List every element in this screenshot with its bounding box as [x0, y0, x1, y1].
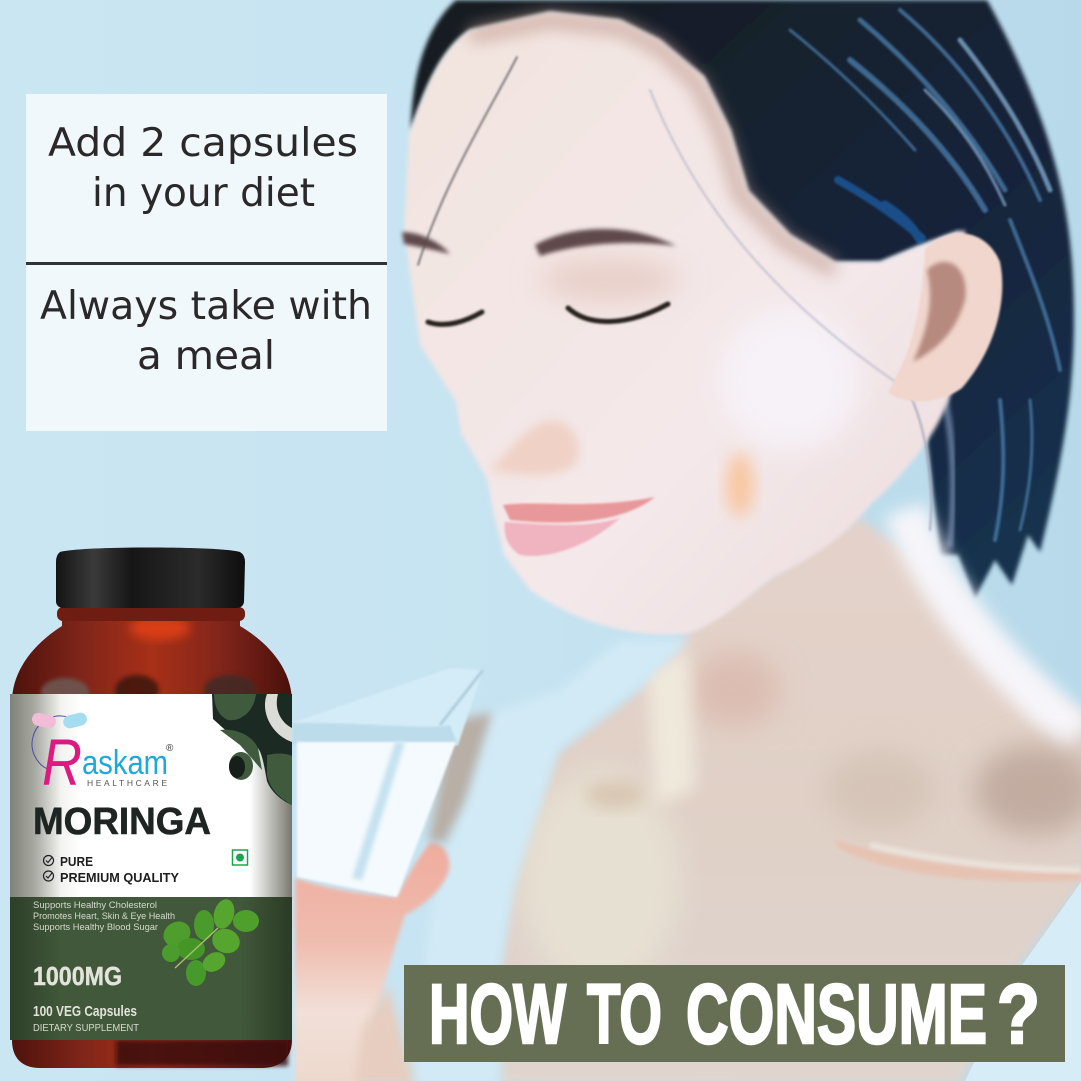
nose shading [490, 420, 579, 475]
eyebrows [402, 229, 676, 256]
text: add 2 capsules: Add 2 capsules [48, 121, 358, 166]
neck and chest [500, 517, 1081, 1081]
instruction panel [26, 94, 387, 431]
banner heading [429, 967, 1040, 1061]
text: add 2 capsules: in your diet [92, 171, 315, 216]
text: add 2 capsules [48, 121, 358, 216]
tank strap right [965, 882, 1081, 1081]
shadow by glass [428, 712, 492, 842]
dosage: 1000MG [33, 961, 122, 991]
hair [411, 0, 1074, 598]
bottle glare [130, 616, 190, 640]
ear [888, 233, 1002, 401]
benefits text: Promotes Heart, Skin & Eye Health [33, 911, 175, 921]
face [404, 12, 965, 635]
product bottle [10, 548, 292, 1068]
logo ring [24, 708, 96, 780]
photo: woman drinking water [292, 0, 1081, 1081]
shoulder shade [975, 745, 1081, 835]
label dark shapes [212, 694, 292, 805]
chest pale strip [648, 650, 695, 805]
text: always take with a meal: Always take with [40, 284, 372, 329]
chest cream area [520, 770, 680, 990]
claims list [44, 854, 179, 885]
veg mark [232, 850, 248, 865]
supplement line: DIETARY SUPPLEMENT [33, 1022, 140, 1034]
capsules inside [41, 675, 288, 1066]
hairline tan fade [470, 20, 835, 270]
claim: pure: PURE [60, 854, 93, 869]
banner background [404, 965, 1065, 1062]
chest centre shade [825, 750, 935, 830]
panel divider [26, 262, 387, 265]
logo subtitle: HEALTHCARE [87, 778, 167, 788]
collarbone line [835, 840, 1081, 881]
text: always take with a meal: a meal [137, 334, 275, 379]
claim: premium quality: PREMIUM QUALITY [60, 870, 179, 885]
label upper white [10, 694, 292, 898]
moringa leaves [159, 897, 259, 986]
stray hair strands [418, 57, 931, 530]
benefits text: Supports Healthy Blood Sugar [33, 922, 158, 932]
drinking glass [292, 668, 483, 897]
capsule blue [62, 711, 88, 730]
tank top left [415, 640, 690, 1081]
logo wordmark: askam [82, 744, 168, 782]
registered mark: ® [166, 743, 174, 754]
chest tan spot [585, 781, 645, 809]
benefits text [33, 900, 175, 932]
product name: MORINGA [33, 801, 211, 843]
eye socket shade [540, 258, 680, 302]
bottle glass body [12, 612, 292, 1068]
banner heading: HOW [429, 967, 566, 1061]
cheek peach glow [726, 453, 754, 517]
banner heading: ? [997, 967, 1040, 1061]
bottle cap [56, 548, 245, 608]
neck ring [57, 607, 245, 621]
text: always take with a meal [40, 284, 372, 379]
cheek white glow [720, 310, 860, 450]
label lower green [10, 897, 292, 1040]
lips [503, 497, 655, 556]
brand logo: Raskam Healthcare [24, 708, 174, 799]
eyes closed [428, 304, 668, 324]
capsule count: 100 VEG Capsules [33, 1003, 137, 1020]
banner heading: TO [587, 967, 662, 1061]
hand [295, 843, 449, 1081]
benefits text: Supports Healthy Cholesterol [33, 900, 157, 910]
logo letter R: R [42, 725, 82, 799]
check icon: pure [44, 856, 54, 866]
banner: how to consume [404, 965, 1065, 1062]
collarbone highlight [870, 845, 1081, 870]
check icon: premium quality [44, 871, 54, 881]
capsule pink [31, 712, 57, 729]
hair highlights [790, 10, 1060, 545]
neck shade [690, 652, 780, 728]
arm edge [355, 985, 415, 1081]
neck and shoulder highlight [905, 510, 1078, 735]
panel background [26, 94, 387, 431]
inner ear [913, 262, 966, 362]
